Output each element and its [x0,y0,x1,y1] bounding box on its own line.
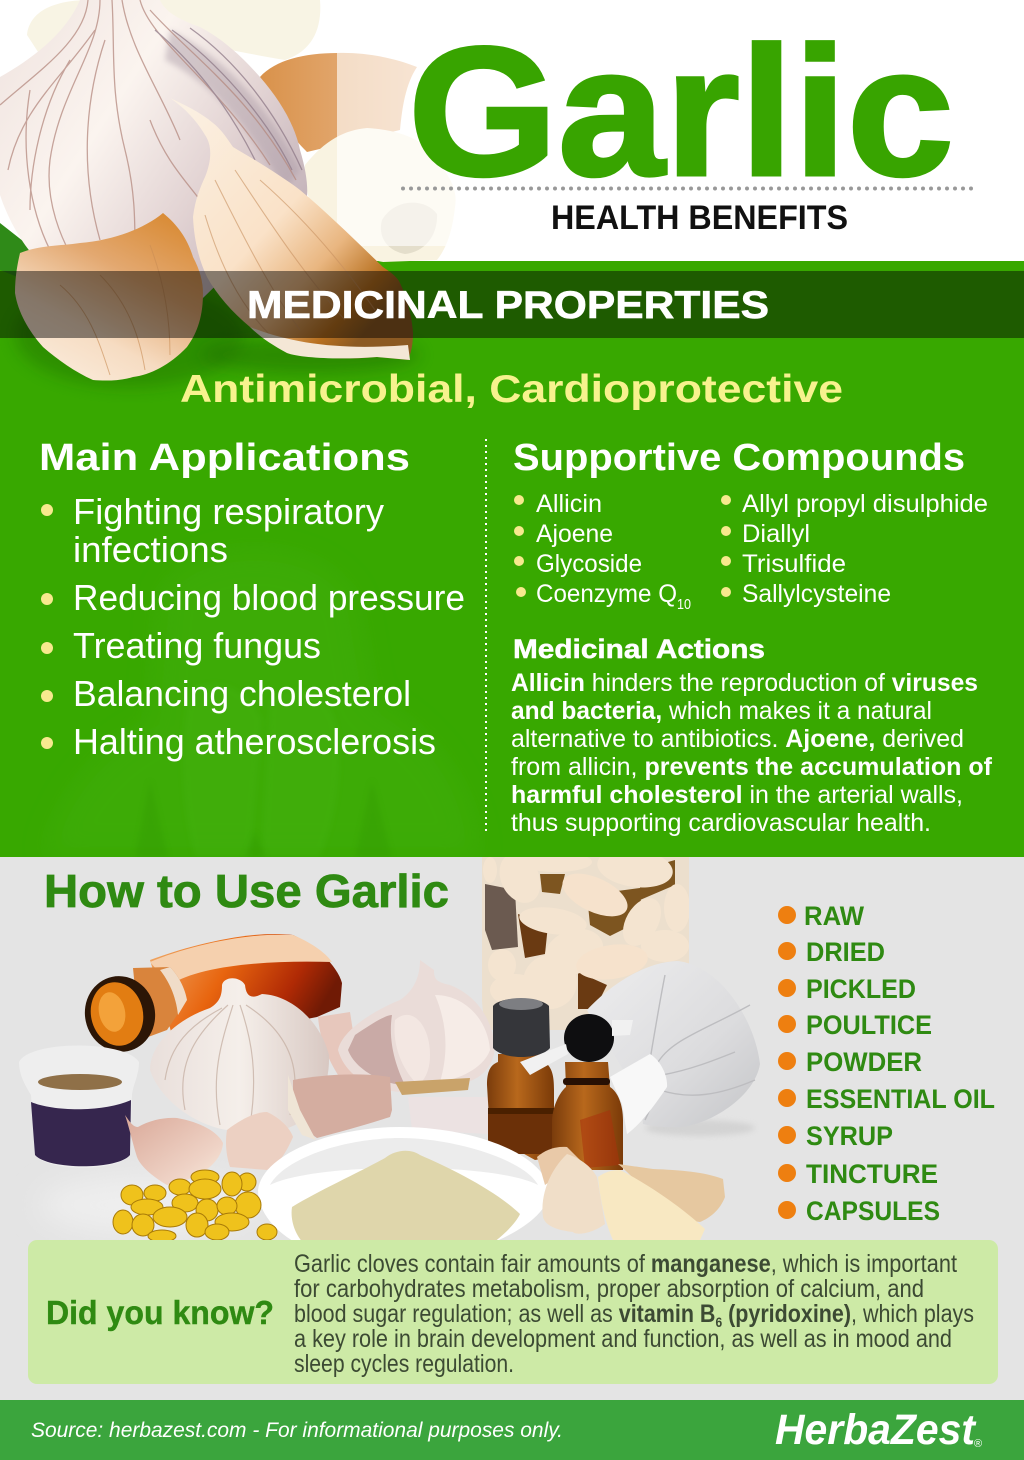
list: compounds left: Glycoside [536,550,642,578]
text: did you know body: sleep cycles regulation. [294,1350,514,1378]
image: garlic preparations group [19,844,760,1245]
text: medicinal actions paragraph: harmful cholesterol in the arterial walls, [511,781,963,809]
text: did you know body: , which plays [851,1300,994,1328]
image: powder bowl [258,1127,549,1245]
image: faint woman silhouette [45,551,478,857]
image: garlic hero group [0,0,477,387]
vertical dotted divider [485,439,487,834]
list: compounds left: Ajoene [536,520,613,548]
list: compounds right: Allyl propyl disulphide [742,490,988,518]
heading: how to use garlic: How to Use Garlic [44,865,449,917]
labels: forms of use: ESSENTIAL OIL [806,1084,995,1114]
heading: medicinal properties: MEDICINAL PROPERTIES [247,284,769,327]
list: applications: Reducing blood pressure [73,577,465,618]
bullets: compounds [514,495,731,597]
text: medicinal actions paragraph: and bacteria, which makes it a natural [511,697,932,725]
text: medicinal actions paragraph: thus supporting cardiovascular health. [511,809,931,837]
labels: forms of use: TINCTURE [806,1159,938,1189]
band: medicinal properties [0,271,1024,338]
panel: medicinal properties background [0,261,1024,857]
text: medicinal actions paragraph: Allicin hinders the reproduction of viruses [511,669,978,697]
list: compounds left: Allicin [536,490,602,518]
image: poultice bundle [587,961,760,1136]
list: compounds right: Diallyl [742,520,810,548]
image: whole garlic bulb [150,978,329,1133]
labels: forms of use: POULTICE [806,1010,932,1040]
subtitle: health benefits: HEALTH BENEFITS [551,199,848,237]
bullets: applications [41,504,53,749]
text: did you know body: 6 [715,1314,722,1330]
list: compounds left: Coenzyme Q [536,580,677,608]
title: Garlic: Garlic [408,8,954,214]
labels: forms of use: POWDER [806,1047,922,1077]
heading: medicinal actions: Medicinal Actions [513,634,765,664]
text: did you know body: (pyridoxine) [722,1300,851,1328]
list: applications: Balancing cholesterol [73,673,411,714]
list: applications: infections [73,529,228,570]
heading: did you know: Did you know? [46,1294,274,1331]
list: applications: Halting atherosclerosis [73,721,436,762]
list: applications: Fighting respiratory [73,491,384,532]
text: did you know body [294,1250,974,1378]
heading: main applications: Main Applications [39,437,410,479]
panel: footer background [0,1400,1024,1460]
image: cracked garlic bulb [338,960,495,1134]
list: compounds left: 10 [677,596,691,613]
image: pickled garlic jar [482,844,690,1030]
list: compounds right [742,490,988,608]
labels: forms of use [804,901,995,1226]
subheading: properties: Antimicrobial, Cardioprotective [180,368,843,411]
text: medicinal actions paragraph [511,669,993,837]
text: medicinal actions paragraph: from allicin, prevents the accumulation of [511,753,993,781]
labels: forms of use: CAPSULES [806,1196,940,1226]
labels: forms of use: DRIED [806,937,885,967]
text: did you know body: for carbohydrates metabolism, proper absorption of calcium, and [294,1275,924,1303]
list: forms of use [778,901,995,1226]
image: pink clove behind bulbs [318,1012,360,1078]
image: dropper bottle large [487,998,554,1160]
footer: HerbaZest logo: ® [974,1438,982,1450]
list: applications [73,491,465,762]
labels: forms of use: PICKLED [806,974,916,1004]
image: amber bottle on side [78,934,342,1058]
footer: source note: Source: herbazest.com - For informational purposes only. [31,1419,563,1442]
heading: supportive compounds: Supportive Compounds [513,437,965,479]
dotted title rule [403,186,974,190]
text: did you know body: blood sugar regulation; as well as vitamin B [294,1300,731,1328]
list: compounds right: Trisulfide [742,550,846,578]
image: syrup cup [19,1046,139,1168]
text: did you know body: Garlic cloves contain fair amounts of manganese, which is important [294,1250,957,1278]
image: gel capsules [113,1170,277,1242]
bullets: forms of use [778,906,796,1219]
footer: HerbaZest logo: HerbaZest [775,1406,977,1454]
labels: forms of use: RAW [804,901,864,931]
panel: how to use background [0,857,1024,1400]
panel: did you know [28,1240,998,1384]
list: compounds right: Sallylcysteine [742,580,891,608]
labels: forms of use: SYRUP [806,1121,893,1151]
image: small garlic cloves right [537,1147,725,1240]
image: dropper bottle small [520,1014,633,1170]
section: supportive compounds [511,437,993,837]
section: main applications [39,437,465,762]
text: medicinal actions paragraph: alternative to antibiotics. Ajoene, derived [511,725,964,753]
list: applications: Treating fungus [73,625,321,666]
image: loose garlic cloves [125,1074,392,1185]
list: compounds left [536,490,691,613]
